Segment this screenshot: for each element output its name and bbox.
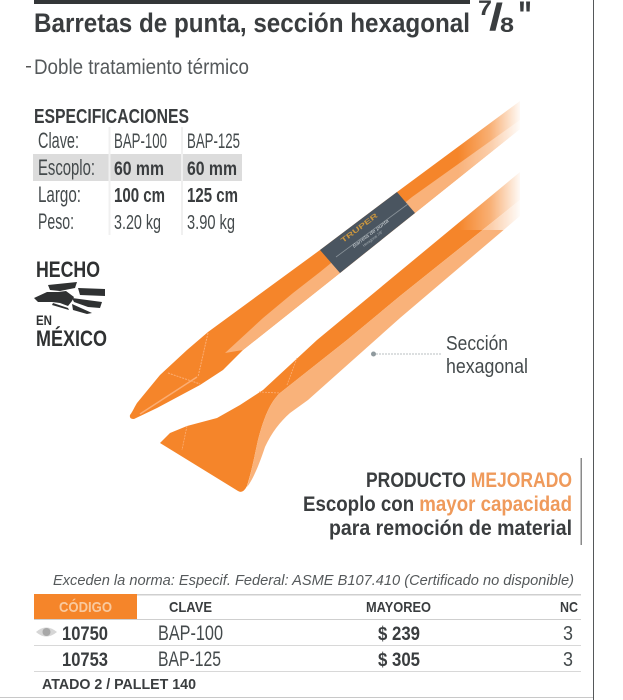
callout: seccion hexagonal: [371, 333, 528, 378]
icon: eye: [36, 628, 57, 636]
specifications table: Clave:: [38, 128, 79, 153]
badge: hecho en mexico: EN: [36, 312, 52, 328]
specifications table: BAP-100: [114, 130, 167, 153]
price table: NC: [560, 599, 578, 616]
price table: CLAVE: [169, 599, 212, 616]
badge: hecho en mexico: HECHO: [36, 257, 100, 282]
specifications table: ESPECIFICACIONES: [34, 106, 189, 128]
label band: TRUPER: [340, 213, 379, 245]
price table: BAP-125: [158, 648, 221, 671]
callout: seccion hexagonal: hexagonal: [446, 356, 528, 378]
price table: BAP-100: [158, 622, 223, 645]
specifications table: Peso:: [38, 209, 74, 234]
callout: producto mejorado: Escoplo con mayor capacidad: [303, 493, 572, 516]
price table: 10750: [62, 624, 108, 645]
price table: $ 239: [378, 624, 420, 645]
specifications table: 60 mm: [114, 159, 164, 180]
specifications table: [33, 106, 242, 235]
icon: eagle: [34, 282, 105, 314]
product illustration: pointed bar: [130, 101, 520, 419]
price table: 3: [563, 649, 573, 671]
title: 8: [500, 14, 514, 37]
price table: ATADO 2 / PALLET 140: [42, 676, 196, 693]
price table: CÓDIGO: [59, 598, 112, 616]
feature bullet: Doble tratamiento térmico: [34, 56, 249, 79]
callout: producto mejorado: PRODUCTO MEJORADO: [366, 469, 572, 492]
specifications table: Largo:: [38, 182, 81, 207]
price table: 3: [563, 623, 573, 645]
title: Barretas de punta, sección hexagonal: [34, 8, 470, 38]
specifications table: 3.90 kg: [187, 212, 235, 234]
callout: producto mejorado: para remoción de material: [329, 517, 572, 540]
price table: Exceden la norma: Especif. Federal: ASME B107.410 (Certificado no disponible): [53, 572, 574, 589]
specifications table: 100 cm: [114, 185, 165, 207]
price table: [34, 572, 581, 693]
specifications table: Escoplo:: [38, 155, 95, 180]
callout: seccion hexagonal: Sección: [446, 333, 508, 355]
product illustration: chisel bar: [160, 172, 520, 492]
badge: hecho en mexico: [34, 257, 107, 351]
label band: Barreta de punta: [352, 218, 391, 250]
price table: 10753: [62, 650, 108, 671]
label band: [320, 192, 415, 273]
specifications table: BAP-125: [187, 130, 240, 153]
specifications table: 125 cm: [187, 185, 238, 207]
callout: producto mejorado: [303, 458, 582, 545]
specifications table: 3.20 kg: [114, 212, 161, 234]
badge: hecho en mexico: MÉXICO: [36, 326, 107, 351]
label band: Hexagonal 7/8": [362, 229, 384, 248]
price table: $ 305: [378, 650, 420, 671]
specifications table: 60 mm: [187, 159, 237, 180]
price table: MAYOREO: [366, 599, 431, 616]
